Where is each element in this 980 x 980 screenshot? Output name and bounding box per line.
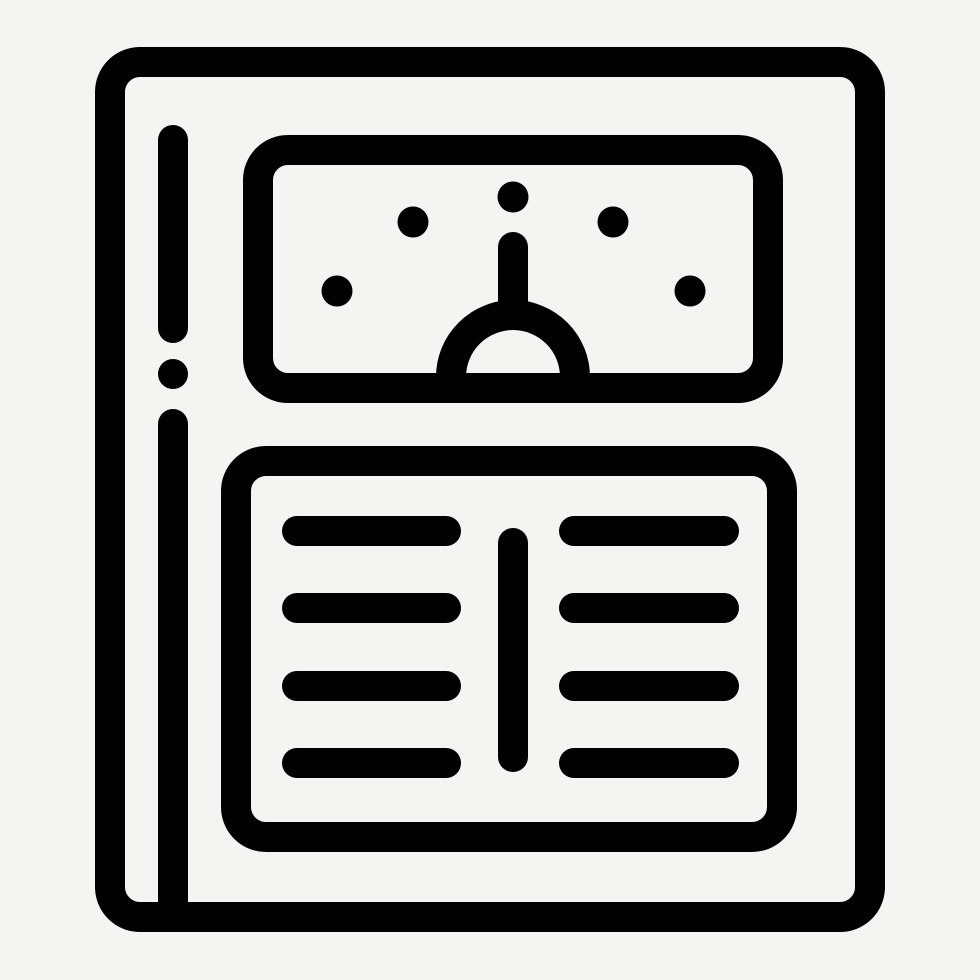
right column lines <box>574 531 724 763</box>
panel: text table <box>236 461 782 837</box>
left vertical bar <box>158 140 188 917</box>
gauge needle <box>498 247 528 312</box>
left column lines <box>297 531 446 763</box>
gauge hub <box>451 315 575 388</box>
outer device frame <box>110 62 870 917</box>
center divider <box>498 543 528 757</box>
gauge tick dots <box>322 182 706 306</box>
panel: gauge display <box>258 150 768 388</box>
